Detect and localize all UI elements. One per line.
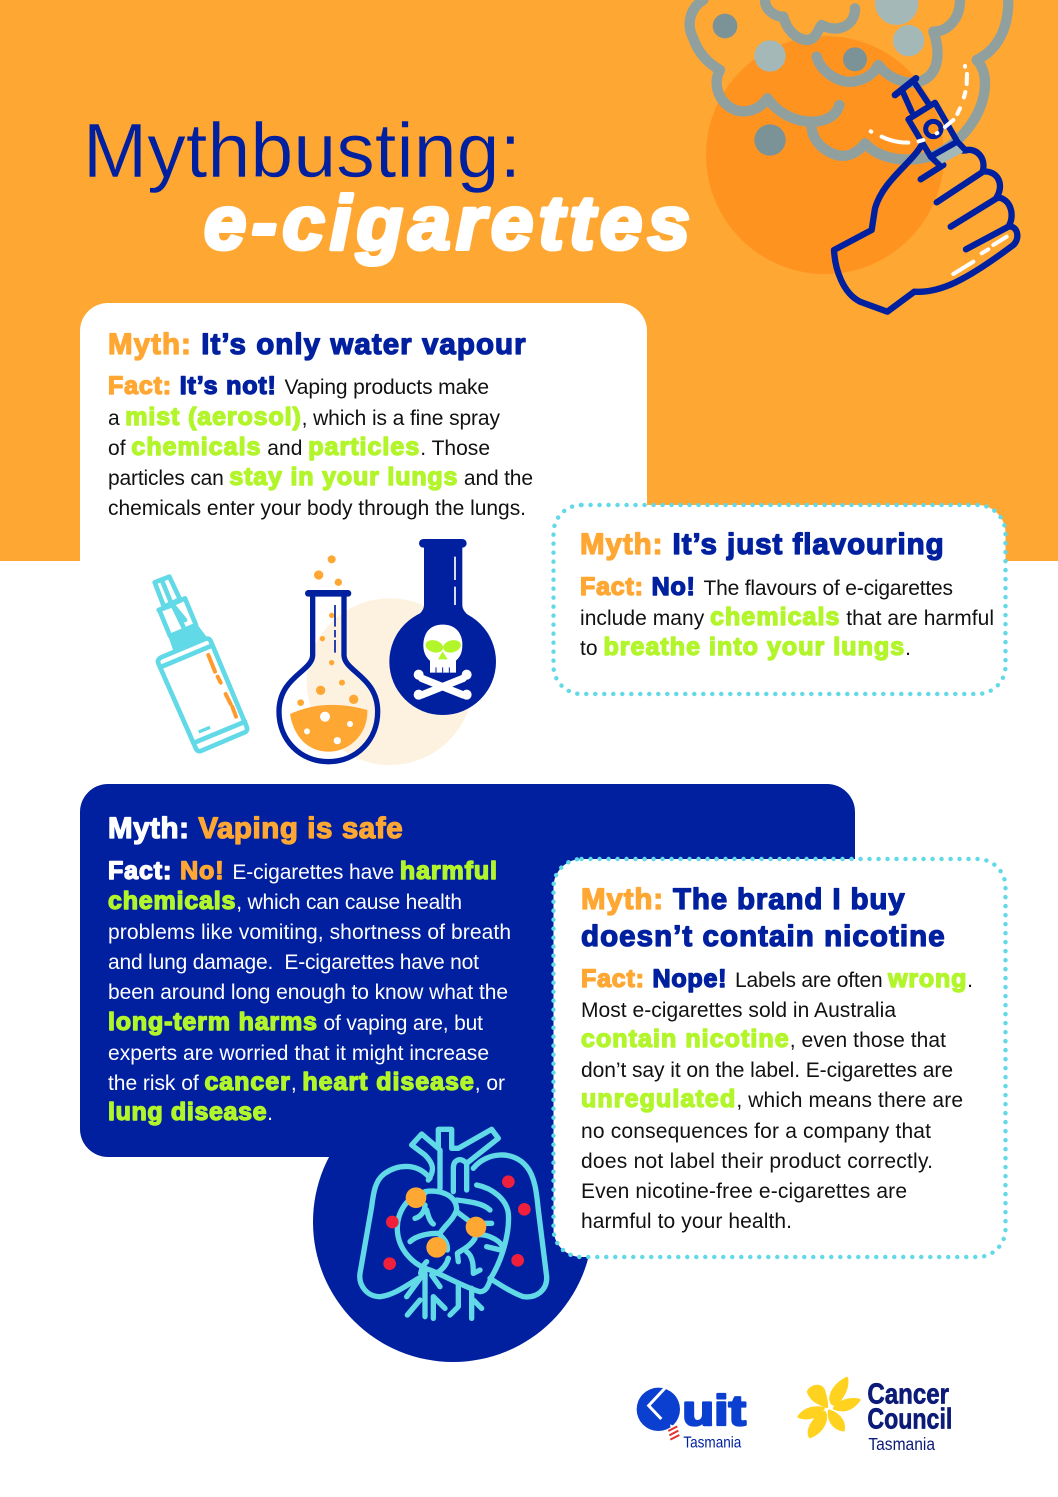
orange header background — [0, 0, 1058, 561]
fact text block: problems like vomiting, shortness of breath — [108, 921, 511, 944]
heading: Myth: It’s just flavouring — [580, 528, 944, 561]
fact text block — [108, 857, 511, 1126]
title: e-cigarettes — [204, 181, 690, 266]
heading: doesn’t contain nicotine — [581, 920, 945, 953]
dotted card — [554, 859, 1006, 1257]
dotted card — [554, 505, 1006, 694]
icon: lungs and heart — [360, 1129, 547, 1318]
icon: orange bubbling flask — [279, 555, 378, 762]
fact text block: experts are worried that it might increase — [108, 1042, 489, 1065]
fact text block: Fact: No! The flavours of e-cigarettes — [580, 573, 953, 601]
fact text block — [581, 965, 973, 1233]
fact text block — [580, 573, 994, 661]
icon: poison flask with skull — [389, 543, 496, 715]
logo: Cancer Council Tasmania: Tasmania — [868, 1434, 935, 1454]
white sparkle dashes — [871, 66, 1007, 274]
logo: Cancer Council Tasmania — [799, 1378, 952, 1454]
navy card — [80, 784, 855, 1157]
panel: white myth card 1 background — [80, 303, 647, 823]
fact text block: no consequences for a company that — [581, 1120, 931, 1143]
title — [83, 108, 690, 266]
heading: Myth: The brand I buy — [581, 883, 905, 916]
fact text block: contain nicotine, even those that — [581, 1025, 946, 1053]
vapour particles — [713, 0, 924, 156]
panel: myth brand without nicotine — [554, 859, 1006, 1257]
fact text block — [108, 372, 533, 520]
logo: Cancer Council Tasmania: Cancer — [867, 1378, 949, 1410]
heading: Myth: It’s only water vapour — [108, 328, 526, 361]
fact text block: of chemicals and particles. Those — [108, 433, 490, 461]
navy circle behind lungs — [313, 1082, 593, 1362]
daffodil icon — [799, 1378, 859, 1437]
vapour cloud — [690, 0, 1008, 160]
logo: Quit Tasmania — [637, 1387, 746, 1452]
logo: Cancer Council Tasmania: Council — [867, 1403, 952, 1435]
fact text block: harmful to your health. — [581, 1210, 792, 1233]
fact text block: lung disease. — [108, 1098, 273, 1126]
fact text block: include many chemicals that are harmful — [580, 603, 994, 631]
illustration: vape, flask and poison flask — [155, 543, 496, 765]
logo: Quit Tasmania: uit — [682, 1387, 746, 1435]
fact text block: been around long enough to know what the — [108, 981, 508, 1004]
hand — [834, 145, 1017, 312]
skull — [423, 625, 462, 673]
cream circle — [307, 598, 473, 765]
fact text block: don’t say it on the label. E-cigarettes are — [581, 1059, 953, 1082]
illustration: hand holding vape with vapour cloud — [690, 0, 1017, 312]
heading — [581, 883, 945, 953]
fact text block: to breathe into your lungs. — [580, 633, 911, 661]
fact text block: unregulated, which means there are — [581, 1085, 963, 1113]
fact text block: Most e-cigarettes sold in Australia — [581, 999, 896, 1022]
fact text block: long-term harms of vaping are, but — [108, 1008, 483, 1036]
fact text block: chemicals enter your body through the lungs. — [108, 497, 526, 520]
icon: vape pen — [155, 577, 247, 751]
fact text block: the risk of cancer, heart disease, or — [108, 1068, 505, 1096]
crossed bones — [416, 672, 469, 697]
logo: Quit Tasmania: Tasmania — [683, 1435, 741, 1452]
fact text block: Fact: Nope! Labels are often wrong. — [581, 965, 973, 993]
fact text block: particles can stay in your lungs and the — [108, 463, 533, 491]
fact text block: chemicals, which can cause health — [108, 887, 462, 915]
fact text block: and lung damage. E-cigarettes have not — [108, 951, 479, 974]
title: Mythbusting: — [83, 108, 521, 194]
panel: myth flavouring — [554, 505, 1006, 694]
vape device — [895, 78, 966, 165]
fact text block: a mist (aerosol), which is a fine spray — [108, 403, 500, 431]
orange sun circle — [706, 36, 944, 274]
panel: myth vaping is safe — [80, 784, 855, 1157]
fact text block: Even nicotine-free e-cigarettes are — [581, 1180, 907, 1203]
panel: myth water vapour — [108, 328, 533, 520]
fact text block: does not label their product correctly. — [581, 1150, 933, 1173]
heading: Myth: Vaping is safe — [108, 812, 403, 845]
fact text block: Fact: It’s not! Vaping products make — [108, 372, 489, 400]
fact text block: Fact: No! E-cigarettes have harmful — [108, 857, 498, 885]
orange and red spots — [383, 1175, 531, 1270]
Q mark — [637, 1387, 682, 1440]
